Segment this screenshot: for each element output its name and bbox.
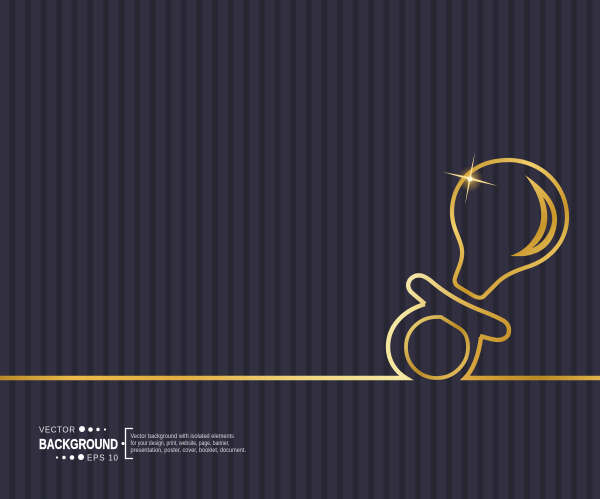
label: VECTOR: VECTOR: [39, 426, 75, 434]
dots: bottom row: [56, 454, 84, 460]
pacifier crescent highlight: [510, 175, 557, 256]
sparkle: [443, 152, 498, 205]
label: EPS 10: EPS 10: [87, 454, 119, 462]
bracket: [122, 428, 133, 458]
description text: Vector background with isolated elements: [130, 433, 235, 440]
logo: VECTOR BACKGROUND EPS 10: [39, 426, 119, 462]
dots: top row: [79, 426, 106, 432]
description text: [130, 433, 246, 454]
description text: for your design, print, website, page, banner,: [130, 440, 230, 447]
horizontal gold line and pacifier shield outline: [0, 304, 600, 378]
pacifier bulb: [452, 160, 567, 298]
description text: presentation, poster, cover, booklet, document.: [130, 447, 246, 454]
pacifier inner ring: [406, 317, 468, 378]
label: BACKGROUND: BACKGROUND: [39, 436, 118, 453]
pacifier flange: [408, 275, 509, 340]
